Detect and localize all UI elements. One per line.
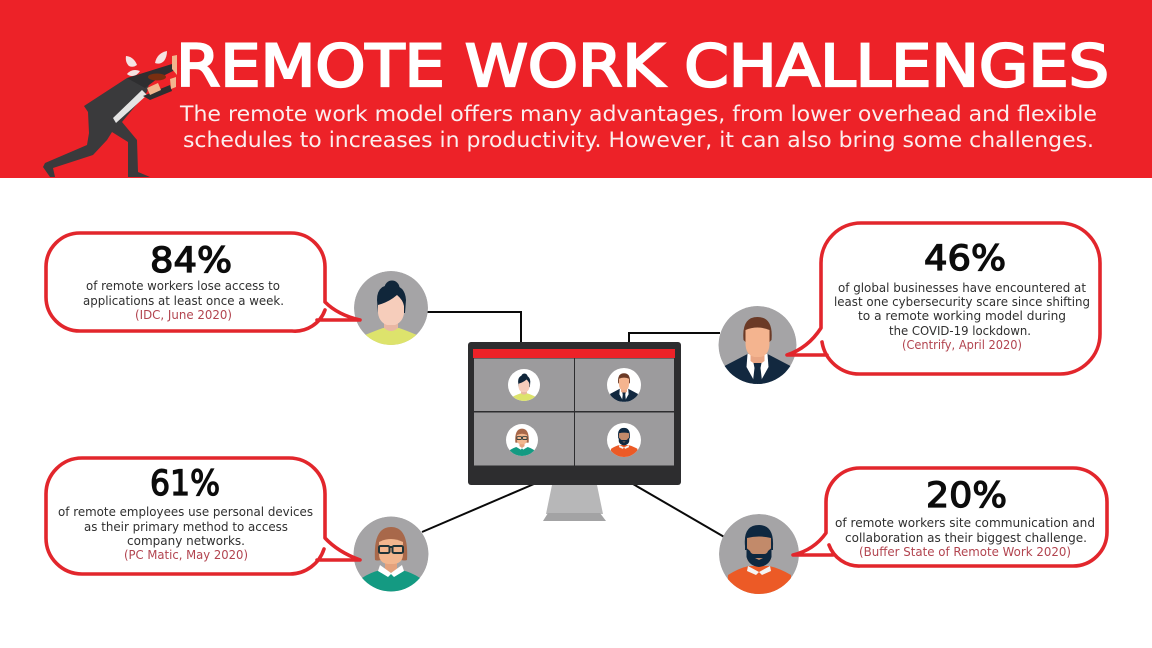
monitor frame — [468, 342, 681, 485]
description: of global businesses have encountered at — [838, 281, 1086, 295]
statistic: 20% — [926, 476, 1007, 516]
source: (Centrify, April 2020) — [902, 338, 1022, 352]
avatar: woman with glasses — [354, 516, 428, 594]
avatar: bearded man — [719, 514, 799, 595]
mini avatar: woman with glasses — [506, 424, 538, 457]
source: (IDC, June 2020) — [135, 308, 232, 322]
title: REMOTE WORK CHALLENGES — [176, 32, 1109, 100]
video call title bar — [473, 349, 675, 358]
panel: 84% callout — [46, 233, 360, 331]
description: of remote employees use personal devices — [58, 505, 313, 519]
speech bubble — [793, 468, 1107, 566]
header banner — [0, 0, 1152, 178]
description — [83, 279, 284, 308]
description: to a remote working model during — [858, 309, 1066, 323]
video call tiles — [474, 358, 674, 466]
mini avatar: woman with bun — [508, 369, 540, 402]
description — [835, 516, 1095, 545]
description: the COVID-19 lockdown. — [889, 324, 1031, 338]
description — [58, 505, 313, 548]
source: (PC Matic, May 2020) — [124, 548, 248, 562]
intro text — [179, 102, 1097, 152]
description: applications at least once a week. — [83, 294, 284, 308]
description: of remote workers lose access to — [86, 279, 280, 293]
panel: 61% callout — [46, 458, 360, 574]
intro text: The remote work model offers many advantages, from lower overhead and flexible — [179, 102, 1097, 126]
illustration: businessman pushing the title — [43, 51, 177, 177]
speech bubble — [46, 458, 360, 574]
statistic: 84% — [150, 241, 232, 281]
speech bubble — [787, 223, 1100, 374]
speech bubble — [46, 233, 360, 331]
description: company networks. — [127, 534, 245, 548]
description: of remote workers site communication and — [835, 516, 1095, 530]
panel: 20% callout — [793, 468, 1107, 566]
connector lines — [422, 312, 726, 538]
statistic: 46% — [924, 239, 1006, 279]
monitor stand — [543, 485, 606, 521]
description — [834, 281, 1090, 338]
monitor — [468, 342, 681, 521]
description: collaboration as their biggest challenge. — [845, 531, 1087, 545]
description: as their primary method to access — [84, 520, 288, 534]
icon: sweat drops — [126, 51, 167, 76]
avatar: man in suit — [718, 306, 796, 385]
icon: businessman legs and torso — [43, 78, 150, 177]
mini avatar: bearded man — [607, 423, 641, 457]
icon: shirt and tie — [113, 90, 147, 123]
statistic: 61% — [150, 464, 220, 504]
description: least one cybersecurity scare since shifting — [834, 295, 1090, 309]
avatar: woman with bun — [354, 271, 428, 348]
intro text: schedules to increases in productivity. However, it can also bring some challenges. — [183, 128, 1094, 152]
panel: 46% callout — [787, 223, 1100, 374]
source: (Buffer State of Remote Work 2020) — [859, 545, 1071, 559]
mini avatar: man in suit — [607, 368, 641, 402]
icon: arms and hands — [127, 55, 177, 100]
